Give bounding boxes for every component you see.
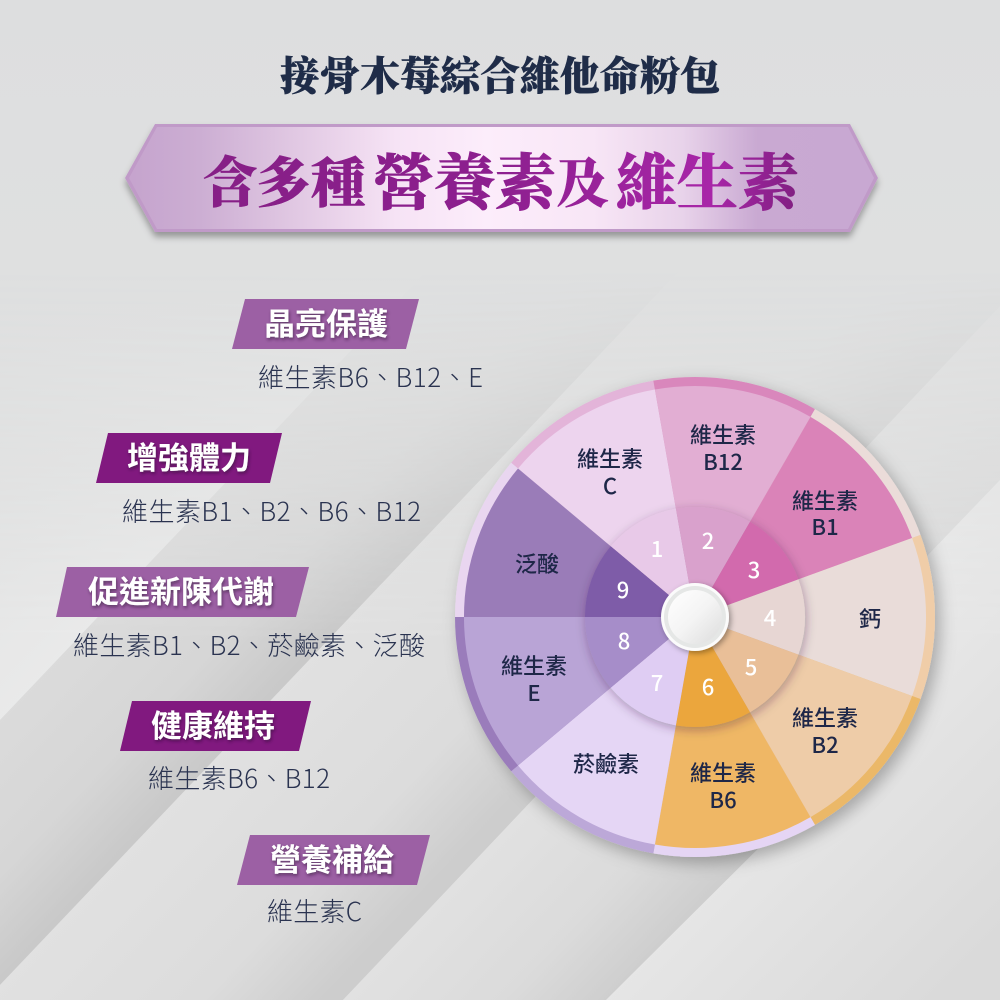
segment labels: 維生素 [792,484,858,516]
segment labels: B6 [709,783,737,815]
banner [125,124,878,232]
segment numbers: 2 [702,524,714,556]
segment numbers [617,524,776,702]
tag text: 促進新陳代謝 [88,567,274,612]
tag [120,701,311,751]
segment labels: C [603,469,617,501]
segment labels: 菸鹼素 [573,747,639,779]
background [0,405,989,1000]
title: 接骨木莓綜合維他命粉包 [280,54,720,99]
segment labels [501,418,881,815]
group: health [120,701,330,796]
group: metabolism [56,567,425,663]
wheel rim [441,366,935,868]
banner shape [125,124,878,232]
segment labels: B2 [811,728,839,760]
segment labels: 維生素 [577,442,643,474]
nutrient list: 維生素B6、B12 [148,759,330,796]
nutrient list: 維生素C [267,892,362,929]
segment labels: 鈣 [859,602,881,634]
segment labels: 維生素 [501,649,567,681]
center hub [661,583,729,651]
segment numbers: 4 [764,601,776,633]
nutrient wheel [441,366,935,868]
tag [237,835,430,885]
tag [56,567,309,617]
tag [96,433,282,483]
banner headline: 及 [556,154,610,214]
banner headline: 維生素 [616,150,801,218]
segment numbers: 3 [748,553,760,585]
group: strength [96,433,421,529]
segment numbers: 8 [618,624,630,656]
segment labels: 泛酸 [515,547,559,579]
segment labels: 維生素 [690,756,756,788]
segment numbers: 6 [702,670,714,702]
tag [232,299,419,349]
nutrient list: 維生素B6、B12、E [258,358,483,395]
segment labels: B12 [703,445,743,477]
inner ring [579,502,805,732]
segment numbers: 1 [651,532,663,564]
nutrient list: 維生素B1、B2、B6、B12 [122,492,421,529]
banner inner fill [129,127,874,229]
segment numbers: 7 [651,666,663,698]
segment numbers: 5 [745,650,757,682]
segment labels: 維生素 [792,701,858,733]
segment numbers: 9 [617,573,629,605]
group: bright protection [232,299,483,395]
nutrient list: 維生素B1、B2、菸鹼素、泛酸 [73,626,425,663]
group: supplement [237,835,430,929]
tag text: 營養補給 [270,835,394,880]
segment labels: B1 [811,510,839,542]
segment labels: 維生素 [690,418,756,450]
wheel segments [451,376,926,858]
tag text: 增強體力 [127,433,251,478]
banner headline: 含多種 [203,153,365,214]
tag text: 健康維持 [151,701,275,746]
tag text: 晶亮保護 [264,299,388,344]
segment labels: E [527,676,541,708]
banner headline: 營養素 [373,150,558,218]
